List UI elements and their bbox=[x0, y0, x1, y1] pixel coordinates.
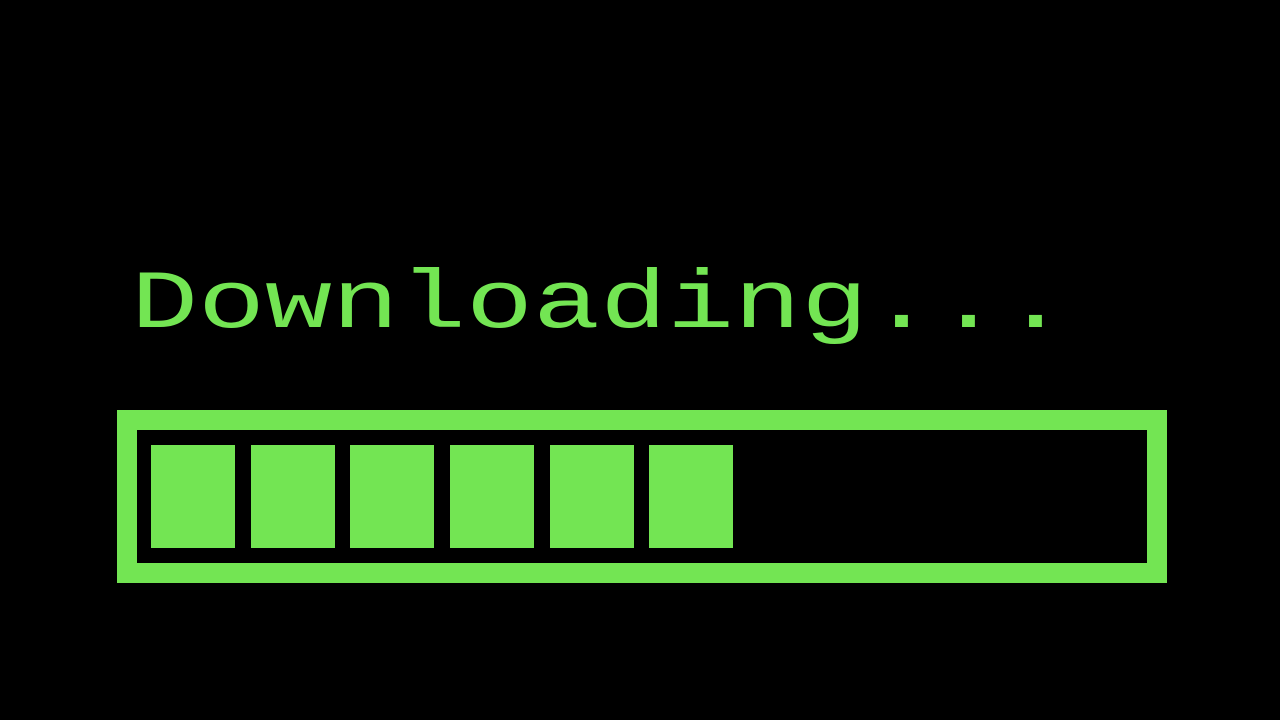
progress block 3 bbox=[350, 445, 434, 548]
progress bar bbox=[117, 410, 1167, 583]
progress block 5 bbox=[550, 445, 634, 548]
progress block 6 bbox=[649, 445, 733, 548]
title: Downloading...: Downloading... bbox=[131, 258, 1069, 352]
progress block 4 bbox=[450, 445, 534, 548]
progress block 2 bbox=[251, 445, 335, 548]
progress block 1 bbox=[151, 445, 235, 548]
